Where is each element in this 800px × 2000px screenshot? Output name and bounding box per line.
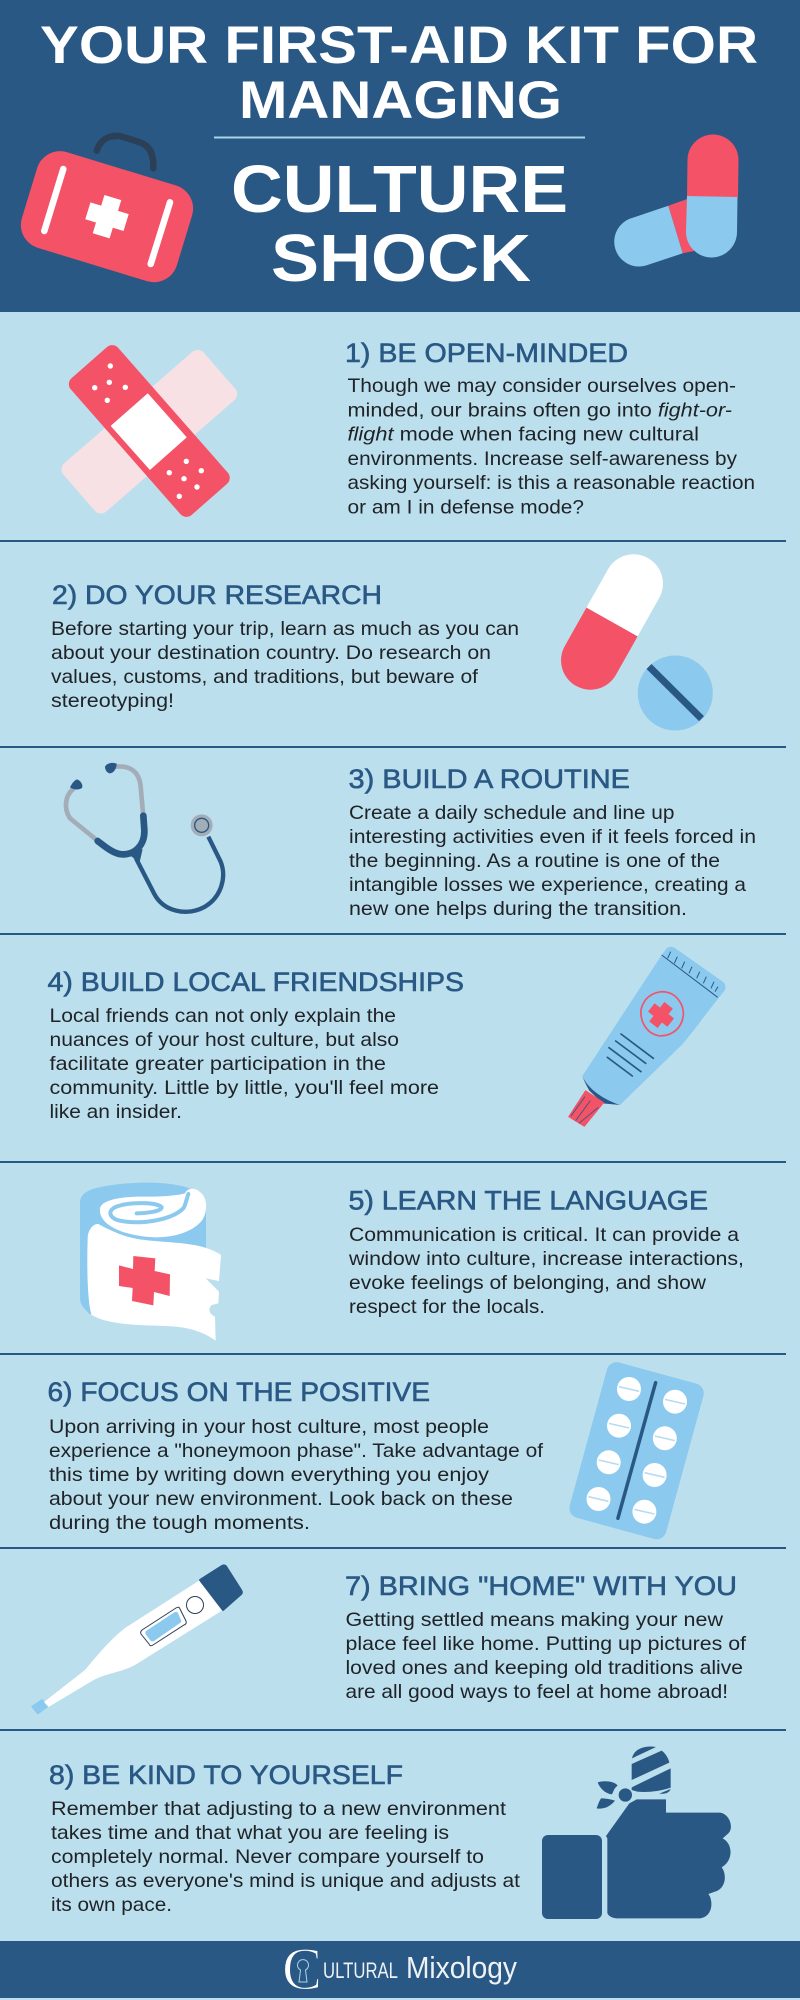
- text block: about your new environment. Look back on these: [49, 1489, 513, 1510]
- icon: bandage roll: [80, 1183, 221, 1341]
- heading: 1) BE OPEN-MINDED: [345, 338, 628, 368]
- text block: interesting activities even if it feels forced in: [349, 827, 756, 848]
- text block: Create a daily schedule and line up: [349, 803, 674, 824]
- icon: capsules: [614, 134, 738, 267]
- text block: stereotyping!: [51, 691, 174, 712]
- text block: Getting settled means making your new: [346, 1610, 723, 1631]
- heading: 4) BUILD LOCAL FRIENDSHIPS: [48, 967, 464, 997]
- heading: 7) BRING "HOME" WITH YOU: [345, 1571, 737, 1601]
- text block: Local friends can not only explain the: [50, 1006, 396, 1027]
- text block: Though we may consider ourselves open-: [348, 376, 736, 397]
- icon: stethoscope: [66, 763, 223, 912]
- text block: the beginning. As a routine is one of the: [349, 851, 720, 872]
- text block: respect for the locals.: [349, 1297, 545, 1318]
- text block: minded, our brains often go into fight-or-: [348, 400, 732, 421]
- text block: during the tough moments.: [49, 1513, 310, 1534]
- logo: Cultural Mixology: ultural: [323, 1950, 398, 1985]
- title: SHOCK: [271, 221, 531, 296]
- icon: thermometer: [33, 1565, 242, 1713]
- text block: Upon arriving in your host culture, most people: [49, 1417, 489, 1438]
- panel: 3) build a routine: [66, 763, 756, 920]
- icon: first-aid kit: [15, 136, 199, 288]
- title: YOUR FIRST-AID KIT FOR: [40, 16, 758, 75]
- text block: community. Little by little, you'll feel more: [50, 1078, 439, 1099]
- heading: 3) BUILD A ROUTINE: [348, 764, 630, 794]
- panel: 8) be kind to yourself: [49, 1747, 731, 1919]
- text block: loved ones and keeping old traditions alive: [346, 1658, 743, 1679]
- title: CULTURE: [231, 152, 568, 227]
- text block: are all good ways to feel at home abroad!: [346, 1682, 728, 1703]
- footer: [0, 1936, 800, 2000]
- text block: this time by writing down everything you enjoy: [49, 1465, 489, 1486]
- text block: takes time and that what you are feeling is: [51, 1823, 449, 1844]
- icon: crossed bandages: [58, 342, 240, 520]
- text block: facilitate greater participation in the: [50, 1054, 386, 1075]
- text block: [50, 1006, 439, 1123]
- text block: [348, 376, 755, 518]
- icon: capsule and tablet: [550, 544, 713, 730]
- header banner: [0, 0, 800, 312]
- text block: Remember that adjusting to a new environment: [51, 1799, 507, 1820]
- text block: evoke feelings of belonging, and show: [349, 1273, 706, 1294]
- text block: like an insider.: [50, 1102, 182, 1123]
- heading: 6) FOCUS ON THE POSITIVE: [48, 1377, 430, 1407]
- panel: 4) build local friendships: [48, 947, 725, 1126]
- title: [40, 16, 758, 296]
- text block: completely normal. Never compare yourself to: [51, 1847, 484, 1868]
- text block: flight mode when facing new cultural: [348, 425, 699, 446]
- panel: 6) focus on the positive: [48, 1360, 706, 1542]
- text block: [348, 1225, 744, 1318]
- text block: [349, 803, 756, 920]
- logo: Cultural Mixology: Mixology: [406, 1950, 517, 1985]
- text block: experience a "honeymoon phase". Take advantage of: [49, 1441, 544, 1462]
- text block: window into culture, increase interactions,: [348, 1249, 744, 1270]
- heading: 8) BE KIND TO YOURSELF: [49, 1760, 403, 1790]
- heading: 2) DO YOUR RESEARCH: [52, 580, 382, 610]
- text block: values, customs, and traditions, but beware of: [51, 667, 479, 688]
- panel: 7) bring home with you: [33, 1565, 747, 1713]
- panel: 2) do your research: [51, 544, 713, 730]
- text block: new one helps during the transition.: [349, 899, 687, 920]
- text block: asking yourself: is this a reasonable reaction: [348, 473, 755, 494]
- panel: 1) be open-minded: [58, 338, 755, 520]
- text block: [346, 1610, 747, 1703]
- text block: its own pace.: [51, 1895, 172, 1916]
- text block: [51, 1799, 521, 1916]
- text block: place feel like home. Putting up pictures of: [346, 1634, 747, 1655]
- title: MANAGING: [239, 71, 562, 130]
- text block: intangible losses we experience, creating a: [349, 875, 746, 896]
- icon: blister pack: [567, 1360, 706, 1542]
- logo: Cultural Mixology: [282, 1936, 517, 2000]
- text block: nuances of your host culture, but also: [50, 1030, 399, 1051]
- panel: 5) learn the language: [80, 1183, 744, 1341]
- text block: or am I in defense mode?: [348, 498, 584, 518]
- text block: [51, 619, 519, 712]
- heading: 5) LEARN THE LANGUAGE: [348, 1186, 708, 1216]
- text block: environments. Increase self-awareness by: [348, 449, 737, 470]
- icon: ointment tube: [569, 947, 725, 1126]
- text block: [49, 1417, 544, 1534]
- icon: bandaged thumbs-up: [542, 1747, 731, 1919]
- text block: about your destination country. Do research on: [51, 643, 491, 664]
- text block: Before starting your trip, learn as much as you can: [51, 619, 519, 640]
- text block: Communication is critical. It can provide a: [349, 1225, 739, 1246]
- text block: others as everyone's mind is unique and adjusts at: [51, 1871, 521, 1892]
